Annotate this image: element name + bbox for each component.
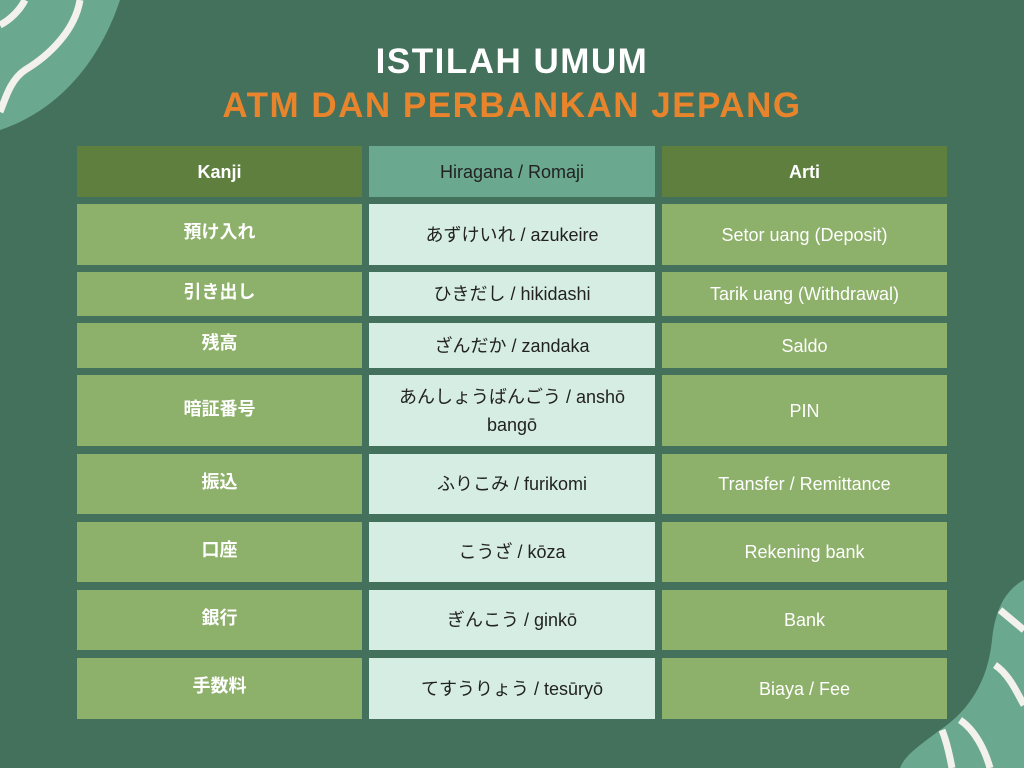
header: Hiragana / Romaji bbox=[369, 146, 655, 197]
row 3: Saldo bbox=[781, 336, 828, 356]
row 2 bbox=[77, 272, 947, 316]
header: Kanji: Kanji bbox=[197, 162, 242, 182]
row 5: ふりこみ / furikomi bbox=[437, 474, 587, 494]
row 7: 銀行 bbox=[202, 608, 238, 628]
row 1: あずけいれ / azukeire bbox=[425, 224, 599, 244]
row 4: あんしょうばんごう / anshō bbox=[399, 386, 625, 406]
row 2: Tarik uang (Withdrawal) bbox=[710, 284, 899, 304]
row 4 bbox=[77, 375, 947, 446]
row 4: bangō bbox=[487, 414, 537, 434]
row 6 bbox=[77, 522, 947, 582]
row 6: 口座 bbox=[202, 540, 238, 560]
row 3: 残高 bbox=[202, 333, 238, 353]
decoration: top-left wave bbox=[0, 0, 120, 130]
row 1: 預け入れ bbox=[184, 222, 256, 242]
row 7: ぎんこう / ginkō bbox=[447, 610, 577, 630]
row 4: 暗証番号 bbox=[184, 399, 256, 419]
title line 2: ATM DAN PERBANKAN JEPANG bbox=[222, 86, 802, 125]
row 5 bbox=[77, 454, 947, 514]
row 3 bbox=[77, 323, 947, 368]
header: Kanji bbox=[77, 146, 362, 197]
row 5: Transfer / Remittance bbox=[718, 474, 891, 494]
row 8 bbox=[77, 658, 947, 719]
row 6: こうざ / kōza bbox=[458, 542, 566, 562]
row 2: 引き出し bbox=[184, 282, 256, 302]
row 6: Rekening bank bbox=[744, 542, 865, 562]
row 3: ざんだか / zandaka bbox=[434, 336, 590, 356]
title line 1: ISTILAH UMUM bbox=[376, 42, 648, 81]
row 1: Setor uang (Deposit) bbox=[721, 224, 888, 244]
row 5: 振込 bbox=[202, 472, 238, 492]
row 7 bbox=[77, 590, 947, 650]
row 8: Biaya / Fee bbox=[759, 678, 850, 698]
header: Arti: Arti bbox=[789, 162, 820, 182]
row 8: 手数料 bbox=[192, 676, 246, 696]
header: Hiragana / Romaji: Hiragana / Romaji bbox=[440, 162, 584, 182]
decoration: bottom-right wave bbox=[900, 580, 1024, 768]
row 1 bbox=[77, 204, 947, 265]
row 7: Bank bbox=[784, 610, 825, 630]
row 2: ひきだし / hikidashi bbox=[433, 284, 591, 304]
header: Arti bbox=[662, 146, 947, 197]
table bbox=[77, 146, 947, 719]
row 4: PIN bbox=[789, 400, 820, 420]
row 8: てすうりょう / tesūryō bbox=[421, 678, 603, 698]
